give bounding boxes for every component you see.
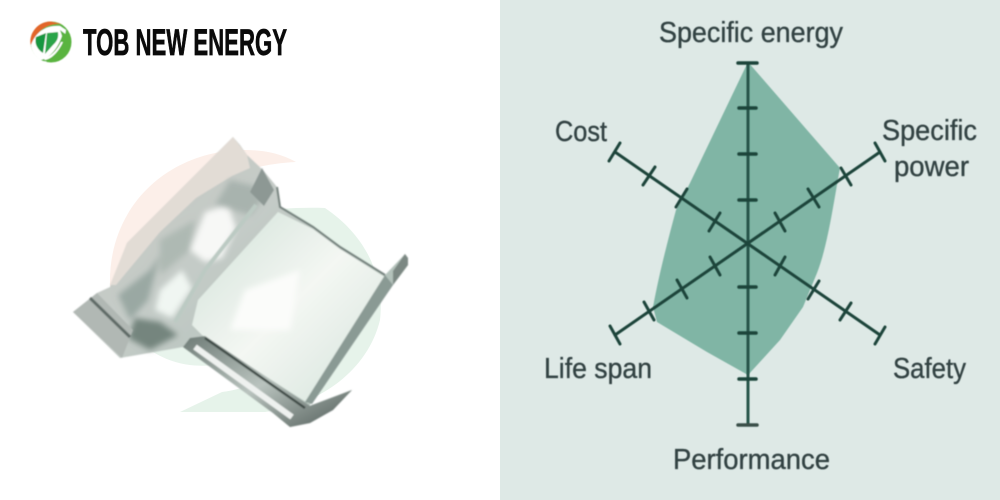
label: life span: Life span bbox=[544, 353, 652, 385]
label: cost: Cost bbox=[555, 116, 607, 148]
label: specific energy: Specific energy bbox=[659, 17, 843, 49]
label: safety: Safety bbox=[893, 353, 966, 385]
upper torn edge bbox=[277, 187, 385, 275]
product photo: aluminium laminate pouch bbox=[73, 137, 408, 427]
label: specific power bbox=[882, 115, 977, 183]
radar chart bbox=[544, 17, 977, 476]
left sealed tab bbox=[73, 293, 133, 358]
watermark logo behind product bbox=[110, 150, 381, 412]
axis labels bbox=[544, 17, 977, 476]
pale front face bbox=[192, 212, 385, 404]
axes and tick marks bbox=[609, 63, 885, 425]
panel: radar chart background bbox=[500, 0, 1000, 500]
label: specific power: power bbox=[894, 151, 969, 183]
panel: white product background bbox=[0, 0, 500, 500]
icon: logo globe bbox=[30, 21, 72, 62]
right seal edge bbox=[305, 275, 393, 404]
data polygon bbox=[653, 62, 840, 375]
pouch base bbox=[73, 137, 408, 427]
logo bbox=[30, 21, 287, 63]
label: specific power: Specific bbox=[882, 115, 977, 147]
wrinkled highlights and shadows bbox=[118, 180, 300, 350]
beige top flap bbox=[110, 137, 250, 285]
brand name: TOB NEW ENERGY bbox=[83, 22, 287, 63]
bottom seal edge bbox=[183, 336, 352, 427]
label: performance: Performance bbox=[673, 444, 830, 476]
